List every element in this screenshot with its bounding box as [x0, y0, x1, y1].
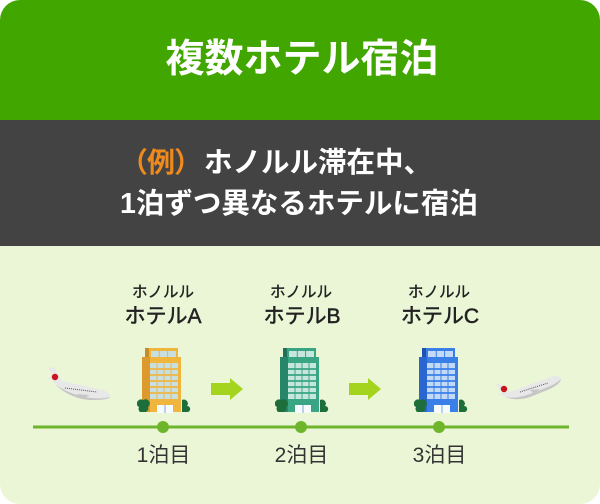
example text line 2: 1泊ずつ異なるホテルに宿泊 — [120, 188, 478, 220]
timeline — [33, 421, 569, 433]
day label 3: 3泊目 — [413, 444, 466, 467]
arrow: B to C — [349, 378, 381, 400]
panel: green header — [0, 0, 600, 120]
hotel A label: ホノルル — [132, 284, 194, 301]
icon: plane arriving — [495, 376, 561, 399]
title: 複数ホテル宿泊 — [165, 38, 439, 81]
hotel A name: ホテルA — [124, 305, 202, 328]
icon: plane departing — [45, 367, 110, 400]
hotel B label: ホノルル — [270, 284, 332, 301]
panel: itinerary — [0, 246, 600, 504]
arrow: A to B — [211, 378, 243, 400]
hotel C label: ホノルル — [408, 284, 470, 301]
hotel C name: ホテルC — [401, 305, 479, 328]
icon: hotel B — [275, 348, 328, 413]
icon: hotel A — [137, 348, 190, 413]
hotel B name: ホテルB — [263, 305, 341, 328]
day label 1: 1泊目 — [137, 444, 190, 467]
panel: dark example band — [0, 120, 600, 246]
example label: （例） — [120, 147, 201, 178]
day label 2: 2泊目 — [275, 444, 328, 467]
icon: hotel C — [414, 348, 467, 413]
example text line 1: ホノルル滞在中、 — [204, 147, 432, 179]
